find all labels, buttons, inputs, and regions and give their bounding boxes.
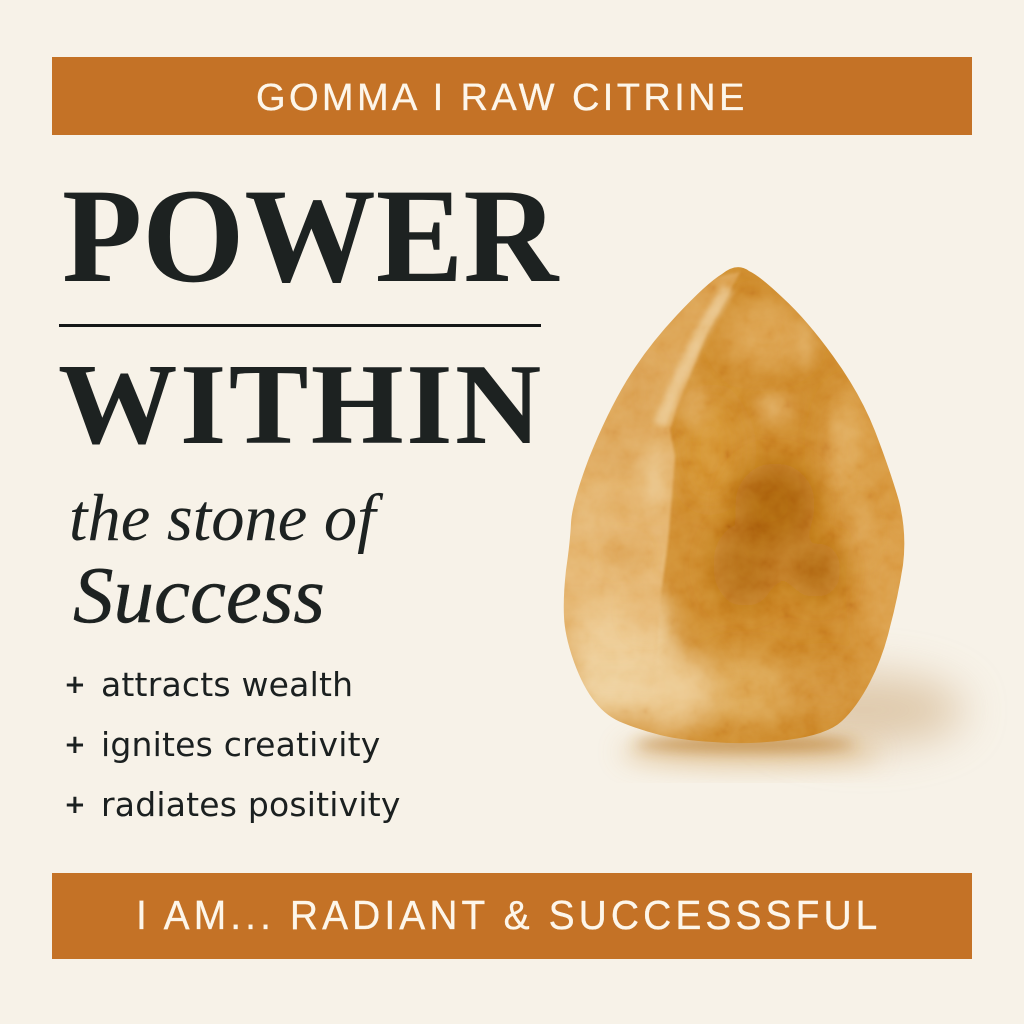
central colour patches xyxy=(682,301,901,726)
benefit list: attracts wealth xyxy=(101,665,353,704)
benefit list: + xyxy=(64,730,86,760)
stone body xyxy=(555,260,910,750)
benefit list xyxy=(64,665,401,824)
left pale face xyxy=(564,272,740,671)
benefit list: + xyxy=(64,790,86,820)
facet highlights xyxy=(681,321,872,560)
divider rule xyxy=(59,324,541,327)
left face mottling xyxy=(578,359,666,634)
pale ridge xyxy=(660,288,728,425)
heading: POWER: POWER xyxy=(62,162,558,311)
top banner xyxy=(52,57,972,135)
heading: WITHIN: WITHIN xyxy=(58,341,544,469)
subtitle: Success xyxy=(73,550,325,640)
pale lower-left wash xyxy=(570,575,715,730)
dark amber core xyxy=(713,463,841,607)
benefit list: + xyxy=(64,670,86,700)
crystal texture xyxy=(555,260,910,750)
top banner: GOMMA I RAW CITRINE xyxy=(256,77,748,119)
bottom banner: I AM... RADIANT & SUCCESSSFUL xyxy=(136,892,881,938)
cast shadow xyxy=(620,674,965,766)
benefit list: ignites creativity xyxy=(101,725,381,764)
subtitle xyxy=(69,482,384,640)
bottom banner xyxy=(52,873,972,959)
illustration: raw citrine stone xyxy=(564,267,978,782)
subtitle: the stone of xyxy=(69,482,376,555)
benefit list: radiates positivity xyxy=(101,785,401,824)
